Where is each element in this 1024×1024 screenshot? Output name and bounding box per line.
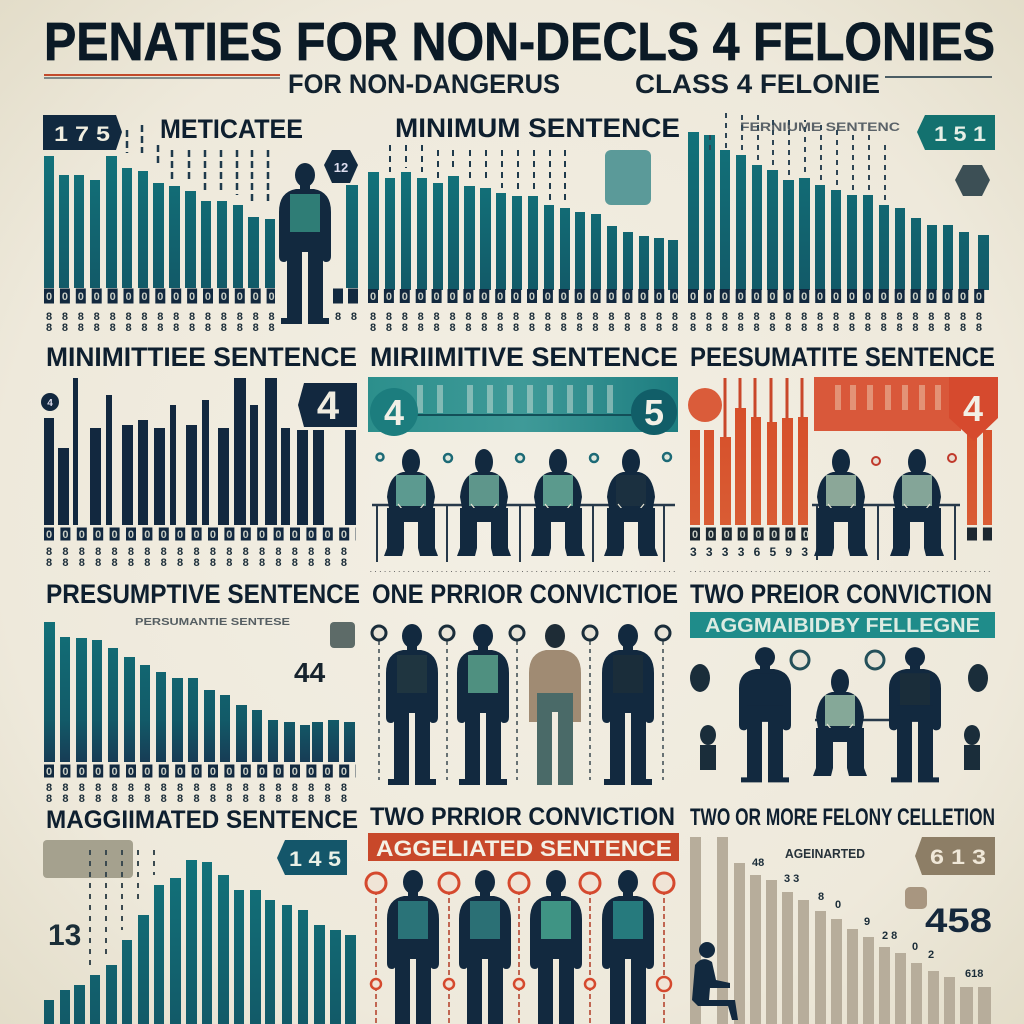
panel: mandatory sentence bars: 88 <box>335 311 357 323</box>
badge: range: 1 7 5 <box>54 123 110 146</box>
badge: 4 <box>298 383 357 428</box>
panel: presumptive sentence teal bars <box>44 579 360 805</box>
tan tag <box>43 840 133 878</box>
value chips: 00000000000000000000 <box>370 291 678 303</box>
icon: badge <box>324 150 358 183</box>
bar chart <box>44 622 355 762</box>
figure: handcuffed man <box>279 163 331 324</box>
side figures <box>690 664 988 770</box>
icon: left badge: 4 <box>47 398 53 409</box>
scattered values: 0 <box>912 941 918 953</box>
panel: minimum sentence bars <box>368 113 680 334</box>
scattered values: 48 <box>752 857 764 869</box>
panel: aggravated sentence bars <box>43 806 358 1024</box>
tick labels: 8888888888888888888 <box>46 546 347 558</box>
icon: left badge <box>41 393 59 411</box>
lollipop markers <box>372 626 670 780</box>
icon: beige tag <box>905 887 927 909</box>
big number: 458 <box>925 902 992 940</box>
big number: 13 <box>48 919 81 952</box>
tick labels <box>46 311 275 334</box>
heading: MAGGIIMATED SENTENCE <box>46 806 358 834</box>
tick labels: 8888888888888888888 <box>46 793 347 805</box>
badge: 5: 5 <box>644 392 664 433</box>
bar chart <box>44 378 356 525</box>
small heading: PERSUMANTIE SENTESE <box>135 617 290 628</box>
tick labels <box>46 782 347 805</box>
small heading: AGEINARTED <box>785 846 865 861</box>
panel: two or more felony convictions, beige bars <box>690 804 995 1024</box>
tick labels: 8888888888888888888 <box>690 322 982 334</box>
heading: TWO PRRIOR CONVICTION <box>370 803 675 831</box>
blurred badge <box>605 150 651 205</box>
panel: two prior conviction <box>690 579 995 782</box>
icon: left circle <box>688 388 722 422</box>
lollipop markers <box>366 873 674 1024</box>
lollipop markers <box>127 125 268 205</box>
figures <box>739 647 941 782</box>
bar chart <box>688 132 989 290</box>
red bar chart <box>690 408 992 525</box>
footnote: ................................................................. <box>370 568 675 574</box>
panel: mandatory sentence bars <box>43 114 358 334</box>
icon: hex badge <box>955 165 990 196</box>
tick labels <box>690 311 982 334</box>
panel: red sentence bars and seated figures <box>688 342 998 574</box>
banner <box>814 377 961 431</box>
seated figures <box>812 449 960 560</box>
heading: MINIMUM SENTENCE <box>395 113 680 143</box>
subtitle <box>44 69 992 99</box>
panel: two prior convictions, red banner <box>366 803 679 1024</box>
beige bar chart <box>690 837 991 1024</box>
bar chart <box>44 860 356 1024</box>
tick labels: 88888888888888888888 <box>370 311 678 323</box>
scattered values <box>752 857 983 980</box>
scattered values: 0 <box>835 899 841 911</box>
red thin markers <box>725 378 802 437</box>
lollipop markers <box>710 110 885 200</box>
value chips: 0000000000000000000 <box>690 291 982 303</box>
seated figure <box>692 942 738 1020</box>
scattered values: 2 8 <box>882 930 897 942</box>
standing figures <box>386 624 654 785</box>
subtitle: CLASS 4 FELONIE <box>635 69 880 99</box>
heading: FERNIUME SENTENC <box>740 120 900 134</box>
tick labels: 888888888888888 <box>46 311 275 323</box>
subtitle: FOR NON-DANGERUS <box>288 69 560 99</box>
markers <box>791 651 884 669</box>
panel: one prior conviction <box>372 579 678 785</box>
markers <box>872 454 956 465</box>
heading: METICATEE <box>160 114 303 144</box>
scattered values: 9 <box>864 916 870 928</box>
tick labels: 888888888888888 <box>46 322 275 334</box>
bar chart <box>44 156 358 288</box>
panel: minimum sentence navy bars <box>41 342 357 569</box>
banner: AGGELIATED SENTENCE <box>376 836 672 861</box>
lollipop markers <box>376 453 671 462</box>
badge: range <box>917 115 995 150</box>
footnote: ................................................................. <box>690 568 990 574</box>
tick labels <box>46 546 347 569</box>
badge: 4: 4 <box>384 392 404 433</box>
value chips: 000000000000000 <box>46 291 275 303</box>
badge: 4 <box>370 388 418 436</box>
heading: ONE PRRIOR CONVICTIOE <box>372 579 678 609</box>
panel: four seated figures, teal banner <box>368 342 678 574</box>
tag: range <box>277 840 347 875</box>
icon: badge: 12 <box>334 160 348 175</box>
lollipop markers <box>390 145 565 204</box>
value chips: 00000000 <box>692 529 809 541</box>
tick labels: 8888888888888888888 <box>690 311 982 323</box>
scattered values: 618 <box>965 968 983 980</box>
lollipop markers <box>90 850 154 965</box>
bar chart <box>368 172 678 290</box>
scattered values: 8 <box>818 891 824 903</box>
standing figures <box>387 870 654 1024</box>
badge: 4: 4 <box>963 388 983 429</box>
panel: presumptive sentence bars <box>688 110 995 334</box>
big number: 44 <box>294 657 326 688</box>
badge: 4 <box>949 377 998 441</box>
tick labels: 8888888888888888888 <box>46 557 347 569</box>
badge: 4: 4 <box>317 384 340 428</box>
badge: range: 1 5 1 <box>934 123 986 146</box>
tag: range: 6 1 3 <box>930 846 986 869</box>
tick labels: 8888888888888888888 <box>46 782 347 794</box>
heading: MIRIIMITIVE SENTENCE <box>370 342 678 372</box>
badge: 5 <box>631 389 677 435</box>
badge: range <box>43 115 122 150</box>
badge <box>330 622 355 648</box>
tick labels: 33336593 <box>690 545 808 559</box>
heading: MINIMITTIEE SENTENCE <box>46 342 357 372</box>
banner <box>368 377 678 436</box>
heading: PRESUMPTIVE SENTENCE <box>46 579 360 609</box>
tick labels <box>370 311 678 334</box>
value chips: 0000000000000000000 <box>46 529 347 541</box>
tag: range <box>915 837 995 875</box>
value chips: 0000000000000000000 <box>46 766 347 778</box>
scattered values: 3 3 <box>784 873 799 885</box>
tick labels: 88888888888888888888 <box>370 322 678 334</box>
tag: range: 1 4 5 <box>289 848 341 871</box>
scattered values: 2 <box>928 949 934 961</box>
banner: AGGMAIBIDBY FELLEGNE <box>705 615 980 637</box>
seated figures <box>372 449 675 562</box>
